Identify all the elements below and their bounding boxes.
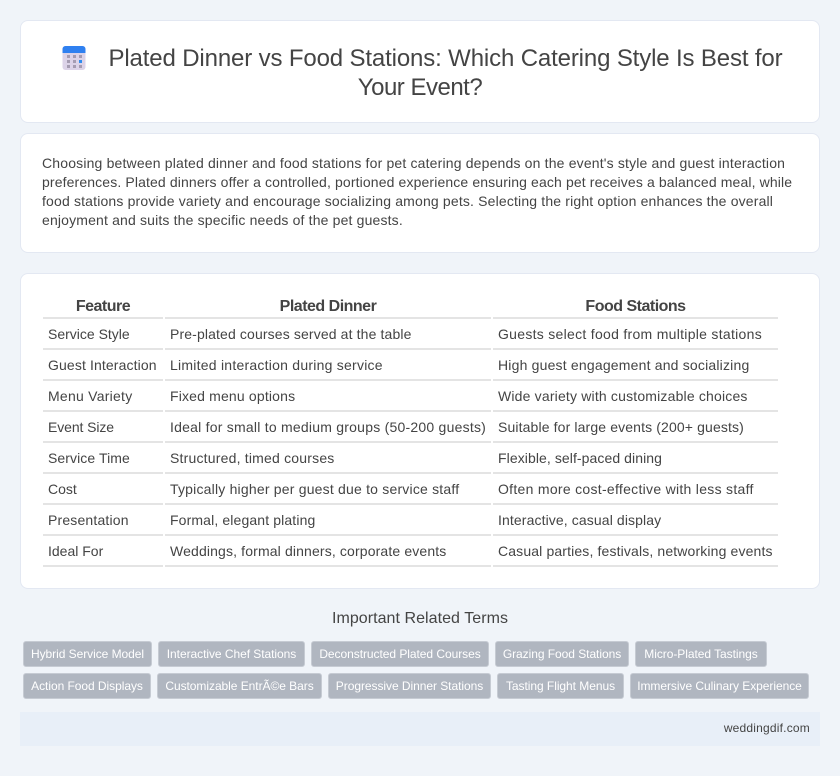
column header: Plated Dinner: Plated Dinner xyxy=(280,298,376,315)
comparison table: Flexible, self-paced dining xyxy=(498,450,662,466)
tag xyxy=(23,641,152,667)
comparison table: High guest engagement and socializing xyxy=(498,357,749,373)
comparison table: Service Style xyxy=(48,326,130,342)
icon: calendar xyxy=(62,46,86,70)
tag: Deconstructed Plated Courses xyxy=(319,647,481,661)
comparison table: Cost xyxy=(48,481,77,497)
tag xyxy=(158,641,305,667)
comparison table: Presentation xyxy=(48,512,129,528)
tag xyxy=(495,641,629,667)
tag: Hybrid Service Model xyxy=(31,647,144,661)
title xyxy=(108,45,782,101)
row: Service Style xyxy=(48,326,762,342)
tag: Micro-Plated Tastings xyxy=(644,647,758,661)
comparison table: Ideal for small to medium groups (50-200 guests) xyxy=(170,419,486,435)
title: Plated Dinner vs Food Stations: Which Catering Style Is Best for xyxy=(108,45,782,72)
tag: Progressive Dinner Stations xyxy=(336,679,483,693)
comparison table: Event Size xyxy=(48,419,114,435)
row: Cost xyxy=(48,481,754,497)
comparison table: Ideal For xyxy=(48,543,103,559)
row: Menu Variety xyxy=(48,388,748,404)
comparison table: Service Time xyxy=(48,450,130,466)
row: Event Size xyxy=(48,419,744,435)
comparison table: Formal, elegant plating xyxy=(170,512,315,528)
tag xyxy=(157,673,322,699)
tag: Customizable EntrÃ©e Bars xyxy=(165,679,314,693)
comparison table: Weddings, formal dinners, corporate events xyxy=(170,543,446,559)
tag: Action Food Displays xyxy=(31,679,143,693)
row: Ideal For xyxy=(48,543,773,559)
comparison table: Limited interaction during service xyxy=(170,357,383,373)
tag: Grazing Food Stations xyxy=(503,647,621,661)
tag xyxy=(311,641,489,667)
intro text: food stations provide variety and encourage socializing among pets. Selecting the right option enhances the overall xyxy=(42,193,773,209)
comparison table: Guests select food from multiple stations xyxy=(498,326,762,342)
comparison table: Pre-plated courses served at the table xyxy=(170,326,412,342)
comparison table: Suitable for large events (200+ guests) xyxy=(498,419,744,435)
panel: title card xyxy=(20,20,820,123)
tag: Tasting Flight Menus xyxy=(506,679,615,693)
heading: related terms: Important Related Terms xyxy=(332,610,508,627)
tag xyxy=(497,673,624,699)
footer bar xyxy=(20,712,820,746)
tag xyxy=(23,673,151,699)
tag xyxy=(635,641,767,667)
panel: comparison table card xyxy=(20,273,820,589)
comparison table: Often more cost-effective with less staff xyxy=(498,481,754,497)
comparison table: Fixed menu options xyxy=(170,388,295,404)
comparison table: Interactive, casual display xyxy=(498,512,661,528)
column header: Feature: Feature xyxy=(76,298,130,315)
related terms tags xyxy=(23,641,809,699)
intro text: enjoyment and suits the specific needs of the pet guests. xyxy=(42,212,403,228)
tag: Interactive Chef Stations xyxy=(167,647,296,661)
tag xyxy=(328,673,491,699)
comparison table: Structured, timed courses xyxy=(170,450,335,466)
intro text xyxy=(42,155,792,228)
footer source text: weddingdif.com xyxy=(724,721,810,735)
comparison table: Typically higher per guest due to service staff xyxy=(170,481,459,497)
row: Service Time xyxy=(48,450,662,466)
panel: intro text card xyxy=(20,133,820,253)
row: Guest Interaction xyxy=(48,357,749,373)
comparison table: Menu Variety xyxy=(48,388,132,404)
comparison table: Casual parties, festivals, networking events xyxy=(498,543,773,559)
tag: Immersive Culinary Experience xyxy=(637,679,802,693)
comparison table xyxy=(43,298,778,567)
comparison table: Guest Interaction xyxy=(48,357,157,373)
comparison table: Wide variety with customizable choices xyxy=(498,388,748,404)
intro text: preferences. Plated dinners offer a controlled, portioned experience ensuring each pet receives a balanced meal, while xyxy=(42,174,792,190)
title: Your Event? xyxy=(358,74,482,101)
column header: Food Stations: Food Stations xyxy=(585,298,686,315)
row: Presentation xyxy=(48,512,662,528)
intro text: Choosing between plated dinner and food stations for pet catering depends on the event's style and guest interaction xyxy=(42,155,785,171)
tag xyxy=(630,673,809,699)
